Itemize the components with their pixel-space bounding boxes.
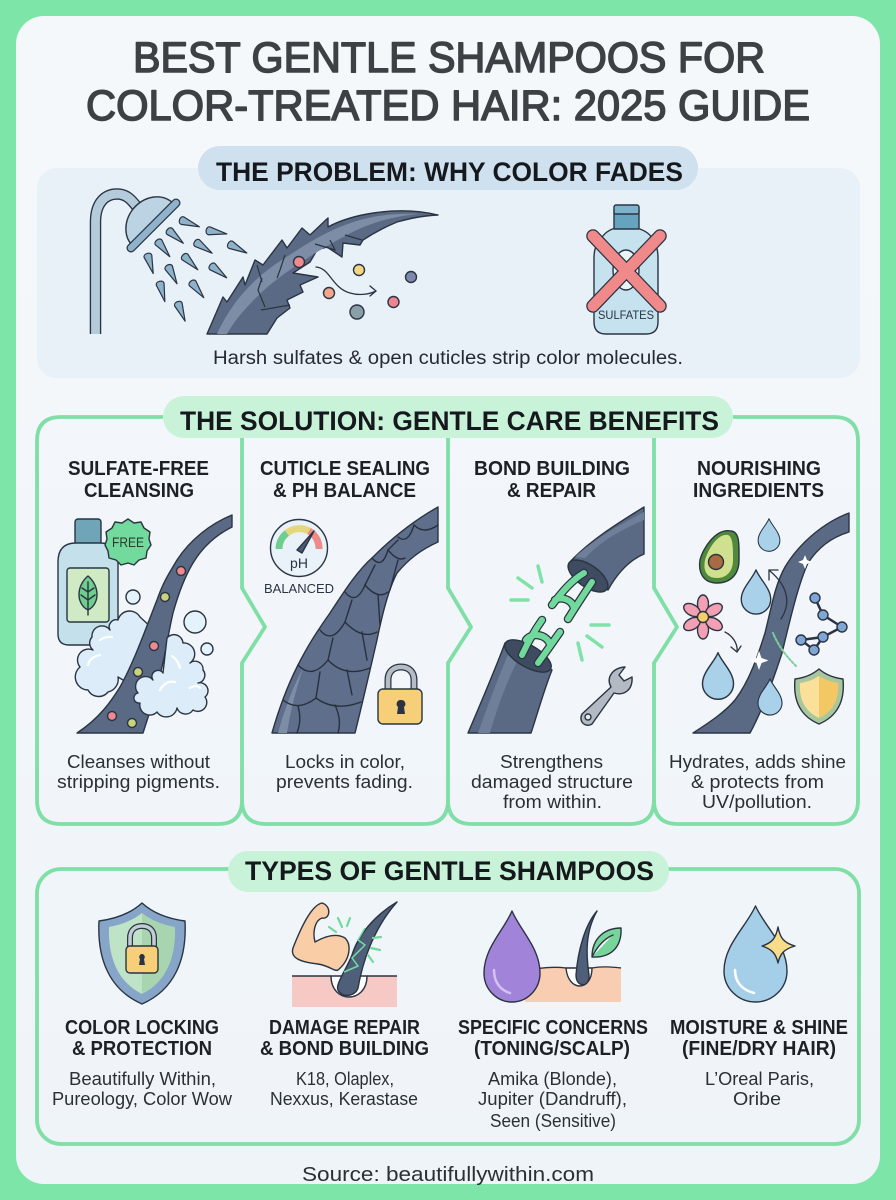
type brands: Nexxus, Kerastase [270,1089,418,1109]
type heading: (TONING/SCALP) [474,1038,630,1060]
hair strand with pigments [77,515,232,733]
card text: Strengthens [500,752,603,772]
card: nourishing ingredients [669,458,849,812]
heading pill: the solution: THE SOLUTION: GENTLE CARE BENEFITS [180,406,719,436]
card text: from within. [503,792,602,812]
type brands: Seen (Sensitive) [490,1111,616,1131]
card text: Cleanses without [67,752,210,772]
card text [471,752,633,812]
icon: shield with lock [99,903,185,1004]
type heading [458,1017,648,1060]
icon: green chain links [522,573,592,663]
icon: free badge [105,519,151,565]
icon: avocado [700,531,739,583]
card heading: CUTICLE SEALING [260,458,430,480]
type heading [670,1017,848,1060]
card heading: NOURISHING [697,458,821,480]
card text: Locks in color, [285,752,405,772]
card: cuticle sealing and pH balance [260,458,438,792]
card: sulfate-free cleansing [57,458,232,792]
type: specific concerns [458,911,648,1131]
foam in front of hair [88,635,208,717]
type brands: Oribe [733,1089,781,1109]
icon: flower [681,595,725,639]
type brands [478,1069,627,1131]
icon: wrench [581,667,632,725]
icon: strong arm and hair [292,902,397,1007]
icon: padlock [378,667,422,724]
card text [57,752,220,792]
card heading: & REPAIR [507,480,597,502]
type heading: SPECIFIC CONCERNS [458,1017,648,1039]
card heading [68,458,209,502]
card text [276,752,413,792]
type brands [270,1069,418,1109]
heading pill: the problem [198,146,698,190]
card heading: INGREDIENTS [693,480,824,502]
icon: pH gauge: BALANCED [264,581,334,596]
hair strand with sealed scales [272,507,438,733]
caption: problem: Harsh sulfates & open cuticles strip color molecules. [213,348,683,369]
icon: crossed-out sulfates bottle [593,205,660,334]
type: moisture and shine [670,906,848,1109]
icon: crossed-out sulfates bottle: SULFATES [598,308,654,322]
type: damage repair [260,902,429,1109]
hair strand broken, joined by chain [468,507,644,733]
card heading [693,458,824,502]
type heading: DAMAGE REPAIR [269,1017,420,1039]
type heading [260,1017,429,1060]
icon: pH gauge: pH [290,555,308,571]
icon: blue drop with sparkle [724,906,795,1002]
card heading [260,458,430,502]
heading pill: types [228,851,669,892]
icon: small shield [795,669,843,724]
card text: UV/pollution. [702,792,812,812]
card text: prevents fading. [276,772,413,792]
type brands: K18, Olaplex, [296,1069,394,1089]
type brands: Jupiter (Dandruff), [478,1089,627,1109]
heading pill: the solution [163,396,733,438]
type brands: L’Oreal Paris, [705,1069,814,1089]
type brands: Pureology, Color Wow [52,1089,233,1109]
icon: damaged hair strand [207,211,438,334]
type brands [705,1069,814,1109]
card heading [474,458,630,502]
icon: bottle with leaf [58,519,118,645]
hair strand with sparkles [693,513,849,733]
card heading: CLEANSING [84,480,194,502]
icon: pH gauge [264,520,334,596]
card text [669,752,846,812]
type heading: & PROTECTION [72,1038,212,1060]
type heading [65,1017,219,1060]
icon: color molecules washing out [294,256,416,319]
type brands [52,1069,233,1109]
type heading: COLOR LOCKING [65,1017,219,1039]
type heading: MOISTURE & SHINE [670,1017,848,1039]
card heading: BOND BUILDING [474,458,630,480]
foam behind hair [75,611,165,696]
title: COLOR-TREATED HAIR: 2025 GUIDE [86,82,810,130]
title: BEST GENTLE SHAMPOOS FOR [133,34,765,82]
source line: Source: beautifullywithin.com [302,1164,594,1186]
type brands: Beautifully Within, [69,1069,216,1089]
heading pill: the problem: THE PROBLEM: WHY COLOR FADES [216,157,683,187]
card text: & protects from [691,772,824,792]
card text: damaged structure [471,772,633,792]
icon: shower head with water [96,194,249,334]
panel: the problem [37,146,860,378]
bubbles [126,590,213,655]
heading pill: types: TYPES OF GENTLE SHAMPOOS [245,856,654,886]
arrows [725,570,796,666]
card heading: SULFATE-FREE [68,458,209,480]
panel: the solution [37,396,858,824]
frame with chevron dividers [37,417,858,824]
icon: free badge: FREE [112,534,144,550]
card: bond building and repair [468,458,644,812]
icon: water drops [702,519,782,715]
type: color locking [52,903,233,1109]
title [86,34,810,130]
card text: Hydrates, adds shine [669,752,846,772]
icon: molecule [796,593,847,655]
type heading: & BOND BUILDING [260,1038,429,1060]
type brands: Amika (Blonde), [488,1069,617,1089]
card text: stripping pigments. [57,772,220,792]
icon: purple drop, scalp and leaf [484,911,621,1002]
type heading: (FINE/DRY HAIR) [682,1038,836,1060]
card heading: & PH BALANCE [273,480,416,502]
sparks [511,566,609,660]
frame [37,869,859,1144]
panel: types of gentle shampoos [37,851,859,1144]
